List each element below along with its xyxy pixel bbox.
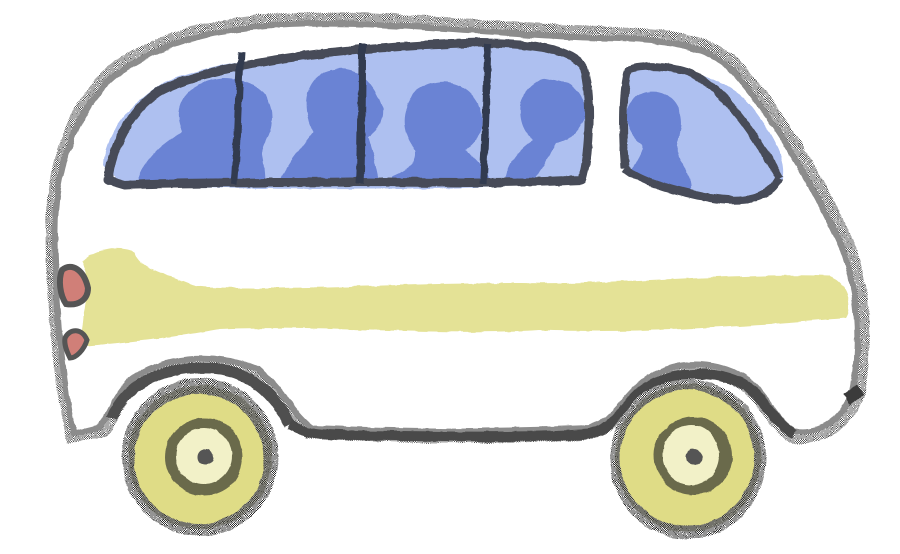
passenger 2	[278, 69, 383, 186]
axle	[686, 449, 702, 465]
axle	[198, 449, 214, 465]
tyre	[610, 379, 766, 539]
upper tail light	[60, 267, 88, 304]
frame	[623, 67, 779, 178]
tyre	[122, 378, 278, 536]
hub	[663, 425, 719, 485]
passenger 4	[505, 79, 586, 186]
dark wheel-arch strokes	[112, 368, 290, 425]
tail lights	[60, 267, 88, 358]
passenger 1	[138, 78, 272, 186]
window frame	[108, 43, 589, 185]
pillars	[234, 52, 241, 184]
lower tail light	[65, 331, 87, 358]
yellow rim	[620, 390, 754, 526]
hub	[176, 428, 232, 484]
passenger 5	[626, 91, 691, 198]
bus body	[52, 19, 863, 437]
window glass wash	[103, 46, 588, 189]
right wheel	[610, 379, 766, 539]
main window	[103, 43, 589, 189]
yellow stripe	[82, 248, 849, 346]
front window	[622, 66, 783, 201]
inner ring	[654, 417, 732, 495]
inner ring	[165, 418, 243, 496]
glass	[622, 66, 783, 201]
passenger 3	[392, 82, 490, 186]
yellow rim	[134, 394, 264, 524]
left wheel	[122, 378, 278, 536]
passengers	[138, 69, 586, 186]
